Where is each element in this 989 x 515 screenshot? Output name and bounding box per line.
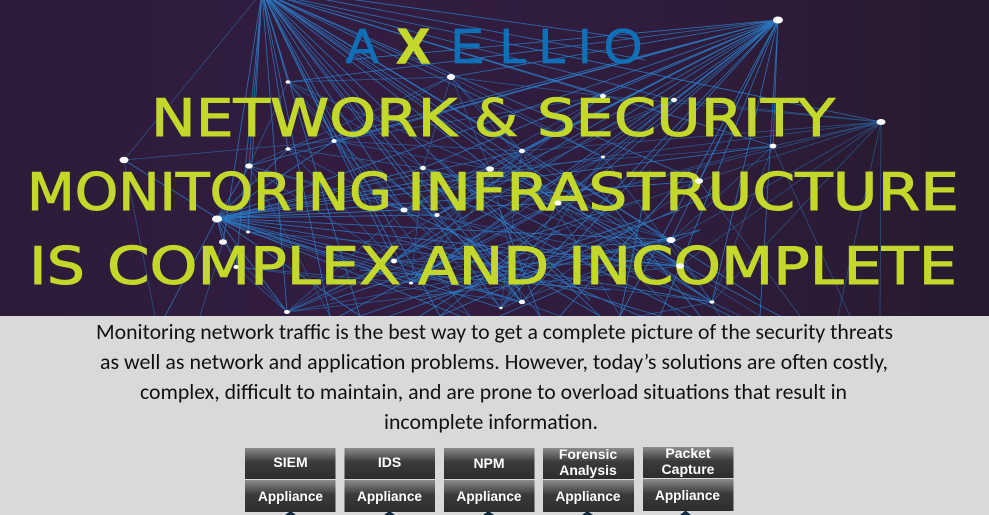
paragraph line 2: as well as network and application problems. However, today’s solutions are often costly, [100, 348, 888, 375]
stack: Packet Capture [643, 445, 734, 515]
stack: Forensic Analysis: Analysis [559, 462, 617, 478]
title line 3: INCOMPLETE [568, 237, 957, 297]
network mesh lines [124, 0, 881, 316]
stack: Packet Capture: Capture [662, 461, 715, 477]
stack: Forensic Analysis: Appliance [556, 488, 621, 504]
lower panel background [0, 316, 989, 515]
stack: IDS: Appliance [357, 488, 422, 504]
title line 3: IS [29, 237, 85, 297]
appliance stacks [245, 445, 734, 515]
intro paragraph [96, 318, 893, 435]
title line 2: INFRASTRUCTURE [407, 163, 959, 223]
title [27, 89, 959, 297]
title line 1: NETWORK [151, 89, 459, 149]
network nodes [120, 16, 886, 314]
title line 2: MONITORING [27, 163, 392, 223]
stack: Forensic Analysis: Forensic [559, 446, 617, 462]
title line 3: AND [418, 237, 549, 297]
stack: NPM: Appliance [456, 488, 522, 504]
paragraph line 1: Monitoring network traffic is the best way to get a complete picture of the security threats [96, 318, 893, 345]
title line 3: COMPLEX [107, 237, 401, 297]
stack: NPM: NPM [473, 455, 505, 471]
stack: SIEM: SIEM [273, 454, 308, 470]
stack: Forensic Analysis [543, 446, 634, 515]
stack: SIEM: Appliance [258, 488, 323, 504]
stack: NPM [444, 448, 534, 515]
stack: IDS [344, 448, 435, 515]
stack: SIEM [245, 448, 336, 515]
paragraph line 3: complex, difficult to maintain, and are prone to overload situations that result in [140, 378, 847, 405]
title line 1: & [474, 89, 518, 149]
header background [0, 0, 989, 316]
title line 1: SECURITY [537, 89, 835, 149]
logo: AXELLIO: A X ELLIO [346, 20, 642, 74]
paragraph line 4: incomplete information. [384, 408, 598, 435]
stack: IDS: IDS [378, 454, 401, 470]
stack: Packet Capture: Packet [665, 445, 711, 461]
stack: Packet Capture: Appliance [655, 487, 720, 503]
